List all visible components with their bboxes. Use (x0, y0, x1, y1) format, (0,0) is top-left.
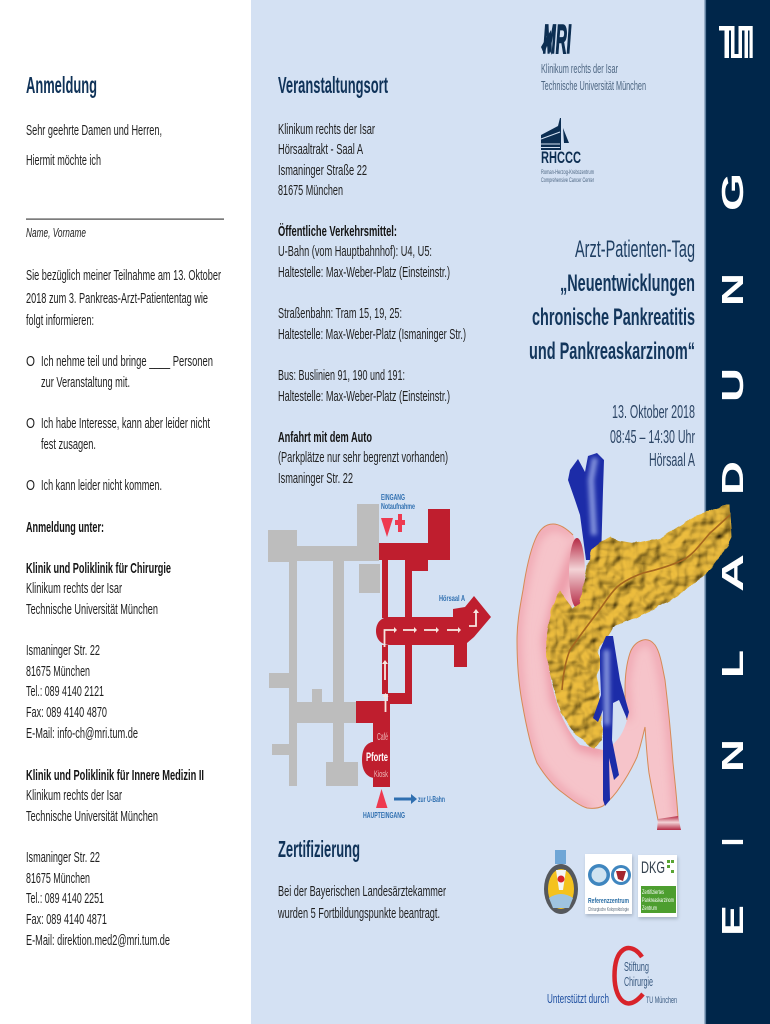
panel: navy banner (704, 0, 770, 1024)
contact: Chirurgie: Fax: 089 4140 4870 (26, 704, 107, 721)
text block: venue address: 81675 München (278, 182, 343, 199)
icon: TUM logo (719, 26, 753, 58)
text block: public transport: Haltestelle: Max-Weber-Platz (Einsteinstr.) (278, 264, 450, 281)
text block: public transport: Haltestelle: Max-Weber-Platz (Einsteinstr.) (278, 388, 450, 405)
text block: request: Sie bezüglich meiner Teilnahme am 13. Oktober (26, 267, 221, 284)
title: event name (529, 236, 695, 365)
heading: Zertifizierung: Zertifizierung (278, 836, 360, 862)
map: Pforte labels: Café (377, 732, 388, 743)
text block: request (26, 267, 221, 329)
lower vein (593, 636, 629, 806)
banner heading: EINLADUNG: D (715, 461, 750, 495)
form options: zur Veranstaltung mit. (41, 374, 130, 391)
logo: Stiftung Chirurgie: Stiftung (624, 959, 649, 974)
map: emergency entrance (381, 492, 415, 537)
contact: Innere Medizin: Ismaninger Str. 22 (26, 849, 100, 866)
banner heading: EINLADUNG: I (715, 838, 750, 846)
logo: DKG certified centre: Zertifiziertes (642, 890, 664, 896)
text block: venue address: Hörsaaltrakt - Saal A (278, 141, 363, 158)
contact: Innere Medizin (26, 767, 204, 949)
banner heading: EINLADUNG (715, 173, 750, 936)
contact: Innere Medizin: 81675 München (26, 870, 90, 887)
background: white form column (0, 0, 251, 1024)
text block: venue address: Ismaninger Straße 22 (278, 162, 367, 179)
banner heading: EINLADUNG: G (715, 173, 750, 211)
certification logos (544, 850, 678, 919)
form options: Ich nehme teil und bringe ____ Personen (41, 353, 213, 370)
form options: O (26, 415, 35, 432)
text block: greeting (26, 122, 162, 169)
map: red route building (356, 509, 491, 787)
text block: certification: Bei der Bayerischen Landesärztekammer (278, 883, 446, 900)
text: supported by: Unterstützt durch (547, 991, 609, 1006)
logo: RHCCC: Comprehensive Cancer Center (541, 178, 594, 184)
banner heading: EINLADUNG: N (715, 739, 750, 772)
form options: fest zusagen. (41, 436, 96, 453)
logo: MRI (541, 16, 572, 62)
duodenum end (657, 816, 681, 830)
text block: certification: wurden 5 Fortbildungspunkte beantragt. (277, 905, 440, 922)
logo: seal (544, 850, 578, 914)
background: light blue panel (251, 0, 705, 1024)
form options (26, 353, 213, 494)
contact: Innere Medizin: Fax: 089 4140 4871 (26, 911, 107, 928)
illustration: pancreas and duodenum (517, 453, 732, 830)
heading: Veranstaltungsort: Veranstaltungsort (278, 72, 388, 98)
logo: DKG certified centre: Pankreaskarzinom (642, 898, 674, 904)
banner heading: EINLADUNG: E (715, 905, 750, 936)
heading: Anmeldung: Anmeldung (26, 72, 97, 98)
contact: Innere Medizin: Klinik und Poliklinik für Innere Medizin II (26, 767, 204, 784)
map: white route arrows (382, 609, 479, 712)
contact: Chirurgie: Klinikum rechts der Isar (26, 580, 122, 597)
map: emergency entrance: EINGANG (381, 492, 405, 502)
pancreas (547, 505, 732, 747)
logo: Stiftung Chirurgie (614, 948, 677, 1005)
banner heading: EINLADUNG: L (715, 650, 750, 678)
contact: Chirurgie: Klinik und Poliklinik für Chirurgie (26, 560, 171, 577)
text block: by car: Anfahrt mit dem Auto (278, 429, 372, 446)
text block: public transport: Straßenbahn: Tram 15, 19, 25: (278, 305, 402, 322)
text block: hospital name (541, 62, 646, 93)
banner heading: EINLADUNG: A (715, 554, 750, 592)
contact: Chirurgie: 81675 München (26, 663, 90, 680)
subheading: Anmeldung unter: Anmeldung unter: (26, 519, 104, 536)
contact: Chirurgie: Ismaninger Str. 22 (26, 642, 100, 659)
duodenum opening (569, 538, 585, 608)
form options: O (26, 477, 35, 494)
map: main entrance (363, 789, 405, 820)
form options: O (26, 353, 35, 370)
banner heading: EINLADUNG: N (715, 273, 750, 306)
logo: DKG certified centre (638, 855, 678, 919)
text: MRI (543, 16, 572, 62)
logo: Stiftung Chirurgie: Chirurgie (624, 974, 653, 989)
text block: request: 2018 zum 3. Pankreas-Arzt-Patiententag wie (26, 290, 208, 307)
text block: public transport: U-Bahn (vom Hauptbahnhof): U4, U5: (278, 243, 432, 260)
contact: Innere Medizin: Tel.: 089 4140 2251 (26, 890, 104, 907)
text block: date, time and room: Hörsaal A (649, 450, 695, 470)
map: Pforte labels: Pforte (366, 750, 388, 764)
map: grey buildings (268, 504, 380, 786)
map: main entrance: HAUPTEINGANG (363, 810, 405, 820)
logo: DGAV reference centre (585, 854, 633, 916)
text block: public transport: Bus: Buslinien 91, 190 und 191: (278, 367, 405, 384)
map: arrow to U-Bahn (394, 794, 445, 804)
text block: request: folgt informieren: (26, 312, 94, 329)
text block: hospital name: Technische Universität München (541, 79, 646, 93)
text block: public transport: Öffentliche Verkehrsmittel: (278, 223, 397, 240)
duodenum (517, 524, 678, 820)
map: lecture hall label: Hörsaal A (439, 593, 465, 603)
text block: by car: (Parkplätze nur sehr begrenzt vorhanden) (278, 449, 448, 466)
contact: Chirurgie (26, 560, 171, 742)
text block: greeting: Hiermit möchte ich (26, 152, 101, 169)
logo: DKG certified centre: DKG (641, 858, 665, 877)
text block: hospital name: Klinikum rechts der Isar (541, 62, 618, 76)
text block: public transport: Haltestelle: Max-Weber-Platz (Ismaninger Str.) (278, 326, 466, 343)
text block: date, time and room: 08:45 – 14:30 Uhr (610, 427, 695, 447)
logo: RHCCC: Roman-Herzog-Krebszentrum (541, 170, 594, 176)
map: Pforte labels: Kiosk (374, 769, 388, 779)
text block: venue address: Klinikum rechts der Isar (278, 121, 375, 138)
contact: Chirurgie: E-Mail: info-ch@mri.tum.de (26, 725, 138, 742)
map: emergency entrance: Notaufnahme (381, 501, 415, 511)
contact: Innere Medizin: E-Mail: direktion.med2@mri.tum.de (26, 932, 170, 949)
text block: public transport (278, 223, 466, 405)
map: arrow to U-Bahn: zur U-Bahn (418, 794, 445, 804)
form field: name: Name, Vorname (26, 225, 86, 240)
form options: Ich habe Interesse, kann aber leider nicht (41, 415, 211, 432)
logo: DGAV reference centre: Chirurgische Koloproktologie (588, 907, 629, 913)
map: Pforte labels (366, 732, 388, 779)
contact: Chirurgie: Tel.: 089 4140 2121 (26, 683, 104, 700)
text block: certification (277, 883, 446, 922)
text block: venue address (278, 121, 375, 199)
logo: RHCCC: RHCCC (541, 148, 581, 167)
text block: by car (278, 429, 448, 487)
logo: DGAV reference centre: Referenzzentrum (588, 898, 629, 905)
form options: Ich kann leider nicht kommen. (41, 477, 162, 494)
logo: RHCCC (541, 118, 594, 184)
text block: date, time and room (610, 402, 695, 470)
site map (268, 492, 491, 820)
upper vein (568, 453, 604, 560)
contact: Innere Medizin: Klinikum rechts der Isar (26, 787, 122, 804)
contact: Innere Medizin: Technische Universität München (26, 808, 158, 825)
text block: date, time and room: 13. Oktober 2018 (612, 402, 695, 422)
contact: Chirurgie: Technische Universität München (26, 601, 158, 618)
logo: DKG certified centre: Zentrum (642, 906, 657, 912)
logo: Stiftung Chirurgie: TU München (646, 995, 677, 1005)
text block: greeting: Sehr geehrte Damen und Herren, (26, 122, 162, 139)
text block: by car: Ismaninger Str. 22 (278, 470, 353, 487)
banner heading: EINLADUNG: U (715, 368, 750, 402)
